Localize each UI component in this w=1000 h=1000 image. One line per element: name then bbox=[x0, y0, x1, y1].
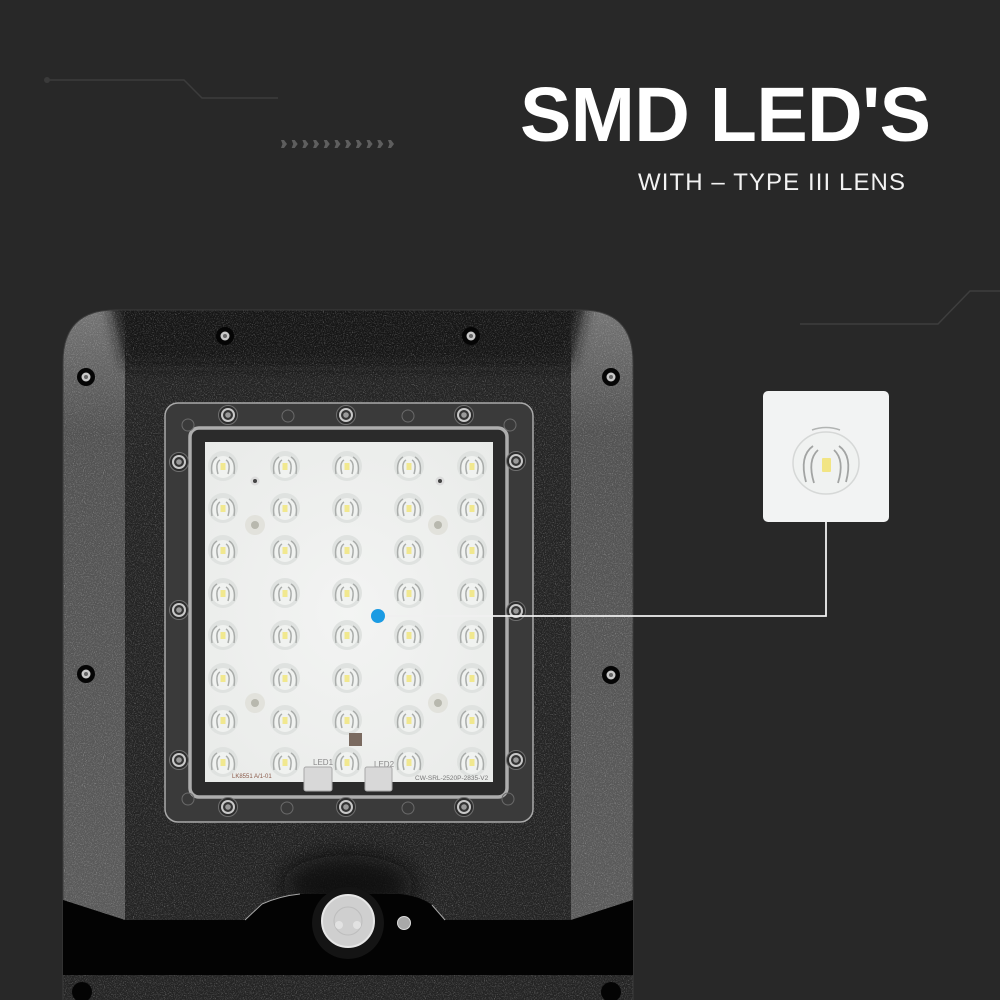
subtitle: WITH – TYPE III LENS bbox=[638, 169, 905, 196]
circuit board details: LED1 bbox=[313, 758, 334, 767]
housing outline bbox=[63, 310, 633, 1000]
title: SMD LED'S bbox=[520, 72, 931, 158]
circuit board details: LED2 bbox=[374, 760, 395, 769]
black sensor band bbox=[63, 855, 633, 975]
circuit board details: LK8551 A/1-01 bbox=[232, 774, 272, 780]
LED array bbox=[208, 451, 487, 777]
solar street light product bbox=[63, 295, 633, 1000]
callout connector line bbox=[378, 522, 826, 616]
circuit board details bbox=[232, 476, 489, 791]
motion sensor bbox=[312, 887, 410, 959]
clear lens frame bbox=[165, 403, 533, 822]
lens frame screws bbox=[170, 406, 526, 816]
LED circuit board bbox=[205, 442, 493, 782]
decorative circuit line right bbox=[800, 291, 1000, 324]
housing screws bbox=[72, 327, 621, 1000]
lamp housing bbox=[63, 295, 633, 1000]
icon: magnified LED lens bbox=[793, 428, 859, 494]
callout card: LED close-up bbox=[763, 391, 889, 522]
decorative chevrons bbox=[281, 140, 394, 148]
callout marker dot bbox=[371, 609, 385, 623]
circuit board details: CW-SRL-2520P-2835-V2 bbox=[415, 775, 489, 782]
decorative circuit line top left bbox=[44, 77, 278, 98]
